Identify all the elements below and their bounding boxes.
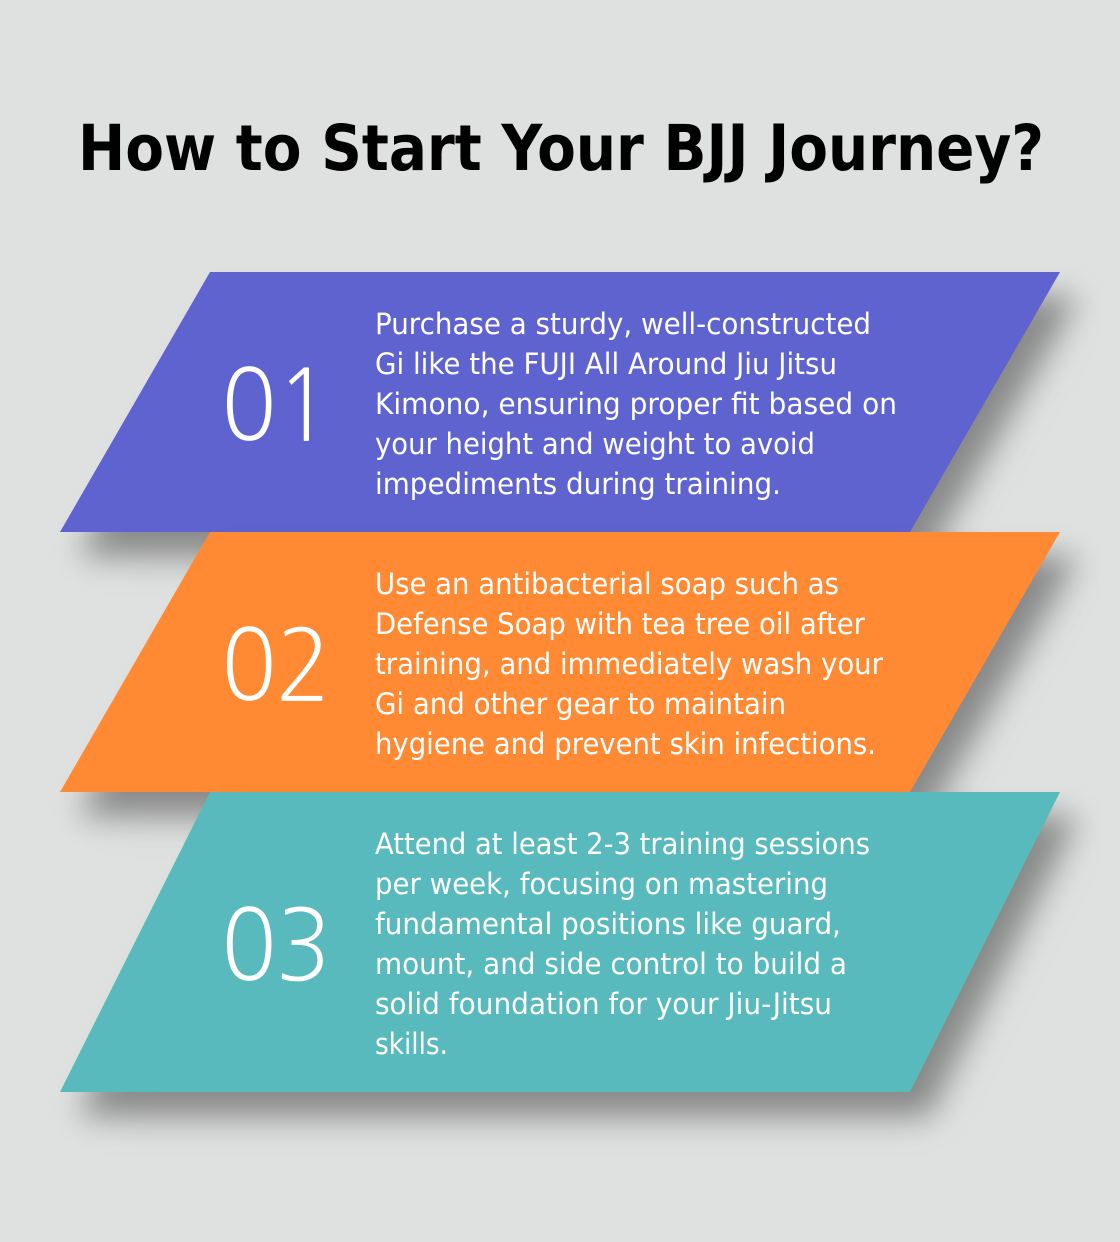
panel: step 1 [60,272,1085,567]
panel: step 3 [60,792,1085,1127]
step 1 description: your height and weight to avoid [375,427,815,461]
step 2 description: Use an antibacterial soap such as [375,567,839,601]
step 2 description: hygiene and prevent skin infections. [375,727,876,761]
step 3 description: mount, and side control to build a [375,947,847,981]
step 2 description [375,567,883,761]
step number 02: 02 [221,615,330,715]
step 3 description: per week, focusing on mastering [375,867,828,901]
step 2 description: Defense Soap with tea tree oil after [375,607,865,641]
step 3 description: fundamental positions like guard, [375,907,841,941]
step number 01: 01 [221,355,330,455]
step 1 description: Kimono, ensuring proper fit based on [375,387,897,421]
step 2 description: training, and immediately wash your [375,647,883,681]
step 3 description: skills. [375,1027,448,1061]
step 1 description [375,307,897,501]
panel: step 2 [60,532,1085,827]
step number 03: 03 [221,895,330,995]
step 3 description: Attend at least 2-3 training sessions [375,827,870,861]
step 1 description: Purchase a sturdy, well-constructed [375,307,871,341]
step 1 description: Gi like the FUJI All Around Jiu Jitsu [375,347,837,381]
step 2 description: Gi and other gear to maintain [375,687,786,721]
step 3 description [375,827,870,1061]
step 3 description: solid foundation for your Jiu-Jitsu [375,987,832,1021]
step 1 description: impediments during training. [375,467,781,501]
